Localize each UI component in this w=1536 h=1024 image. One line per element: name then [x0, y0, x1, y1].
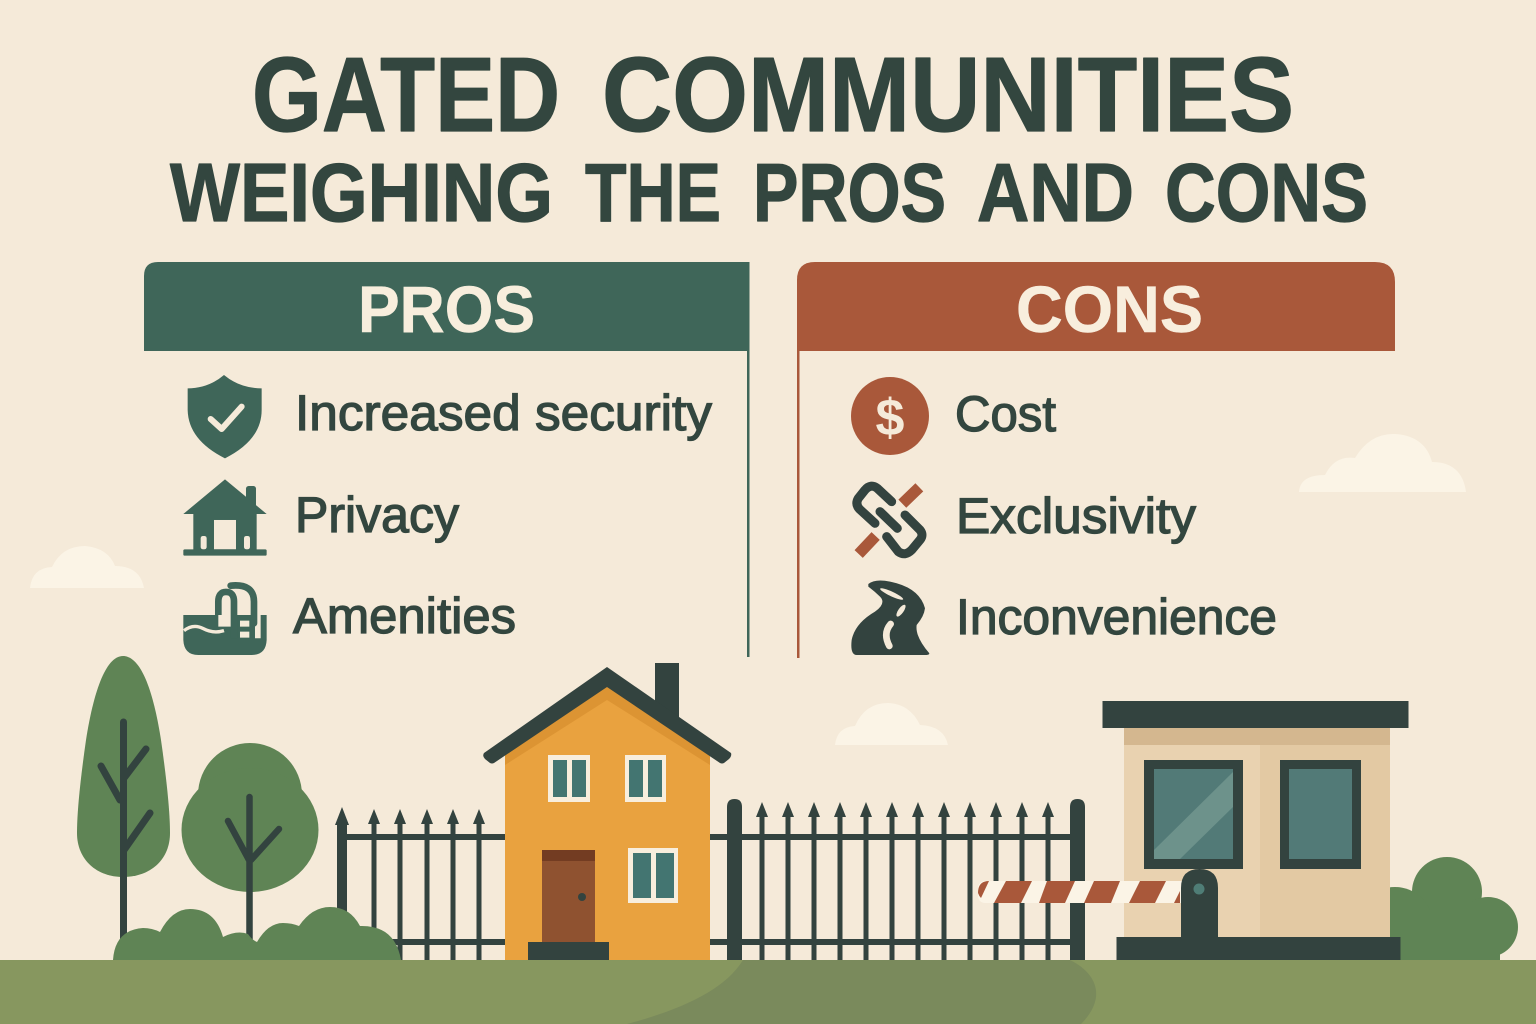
right fence: [710, 799, 1085, 960]
guard booth: [1102, 701, 1408, 960]
icon: broken chain: [857, 486, 922, 554]
door: [542, 850, 595, 944]
bushes: [113, 907, 401, 960]
house: [483, 663, 731, 960]
cloud center: [835, 703, 948, 745]
cost label: Cost: [955, 386, 1056, 442]
door step: [528, 942, 609, 960]
inconvenience label: Inconvenience: [956, 589, 1277, 645]
subtitle: PROS: [753, 146, 946, 239]
left fence: [335, 807, 505, 960]
barrier arm: [978, 869, 1218, 960]
lower window: [628, 848, 678, 903]
title: [252, 36, 1294, 154]
right bush: [1357, 857, 1518, 963]
subtitle: [170, 146, 1368, 239]
increased security label: Increased security: [295, 385, 712, 441]
barrier post: [1181, 869, 1218, 960]
subtitle: THE: [585, 146, 721, 239]
icon: pool: [183, 585, 267, 655]
icon: dollar coin: $: [876, 389, 905, 447]
icon: winding road: [851, 580, 929, 655]
cloud right: [1299, 434, 1466, 492]
cons header: CONS: [1016, 272, 1203, 346]
round tree: [182, 743, 318, 945]
title: GATED: [252, 36, 560, 154]
pros header: PROS: [358, 272, 535, 346]
privacy label: Privacy: [295, 487, 459, 543]
amenities label: Amenities: [293, 588, 516, 644]
upper left window: [548, 755, 590, 802]
road: [627, 960, 1096, 1024]
icon: house: [183, 479, 267, 556]
pros header: [144, 262, 750, 351]
subtitle: AND: [977, 146, 1134, 239]
tall tree: [77, 656, 170, 945]
icon: shield: [188, 375, 262, 458]
booth window right: [1280, 760, 1361, 869]
exclusivity label: Exclusivity: [956, 488, 1196, 544]
subtitle: WEIGHING: [170, 146, 553, 239]
panel: pros: [144, 262, 750, 657]
cloud left: [30, 546, 144, 588]
cons header: [797, 262, 1395, 351]
upper right window: [625, 755, 666, 802]
icon: dollar coin: [851, 377, 929, 455]
title: COMMUNITIES: [602, 36, 1294, 154]
panel: cons: [797, 262, 1395, 658]
booth window left: [1144, 760, 1243, 869]
subtitle: CONS: [1165, 146, 1368, 239]
ground: [0, 960, 1536, 1024]
